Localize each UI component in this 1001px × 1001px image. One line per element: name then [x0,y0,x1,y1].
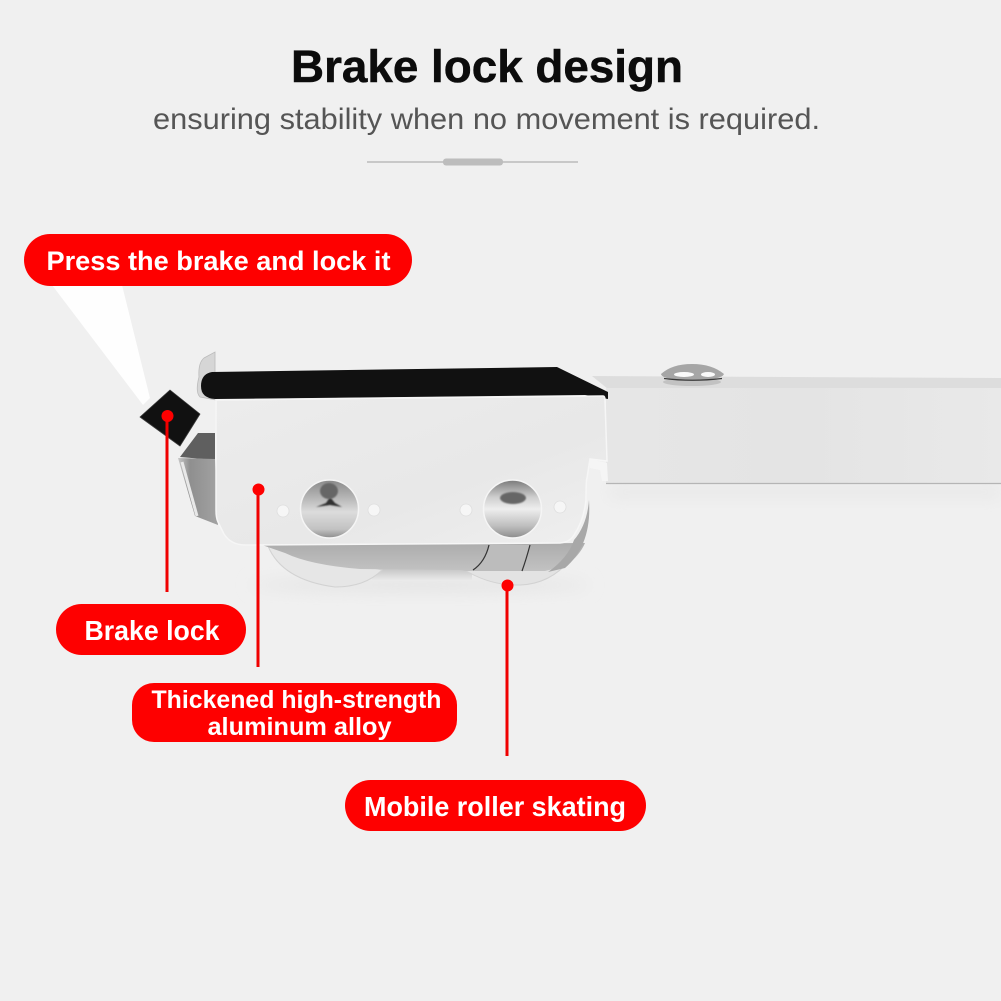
arm: square steel tube [592,376,1001,484]
callout: brake lock: Brake lock [84,615,220,646]
callout: aluminum alloy [132,683,457,742]
callout beam [52,285,150,405]
pointer: brake lock [162,410,174,592]
right axle bolt [484,480,542,538]
callout: aluminum alloy: aluminum alloy [208,713,392,741]
left axle bolt [300,480,358,538]
right rivet dimples [460,501,566,516]
product: roller base with brake [140,352,1001,587]
brake lever body [178,433,218,525]
pointer: aluminum alloy [252,484,264,667]
soft floor shadow [250,487,1001,591]
black rubber pad [201,367,608,399]
rear clip tab [197,352,216,400]
heading divider [367,158,578,166]
subtitle: ensuring stability when no movement is required. [153,103,820,136]
side plate [216,396,607,545]
callout: mobile roller skating: Mobile roller skating [364,791,626,822]
plate edge notch [589,459,608,481]
bolt on arm [661,364,724,386]
callout: mobile roller skating [345,780,646,831]
title: Brake lock design [291,41,683,92]
callout: brake lock [56,604,246,655]
pointer: roller [502,580,514,756]
brake pedal: black square [140,390,200,446]
callout: aluminum alloy: Thickened high-strength [152,686,442,714]
callout: press the brake: Press the brake and lock it [46,246,391,276]
left rivet dimples [277,504,380,517]
rollers [262,500,589,587]
callout: press the brake [24,234,412,286]
